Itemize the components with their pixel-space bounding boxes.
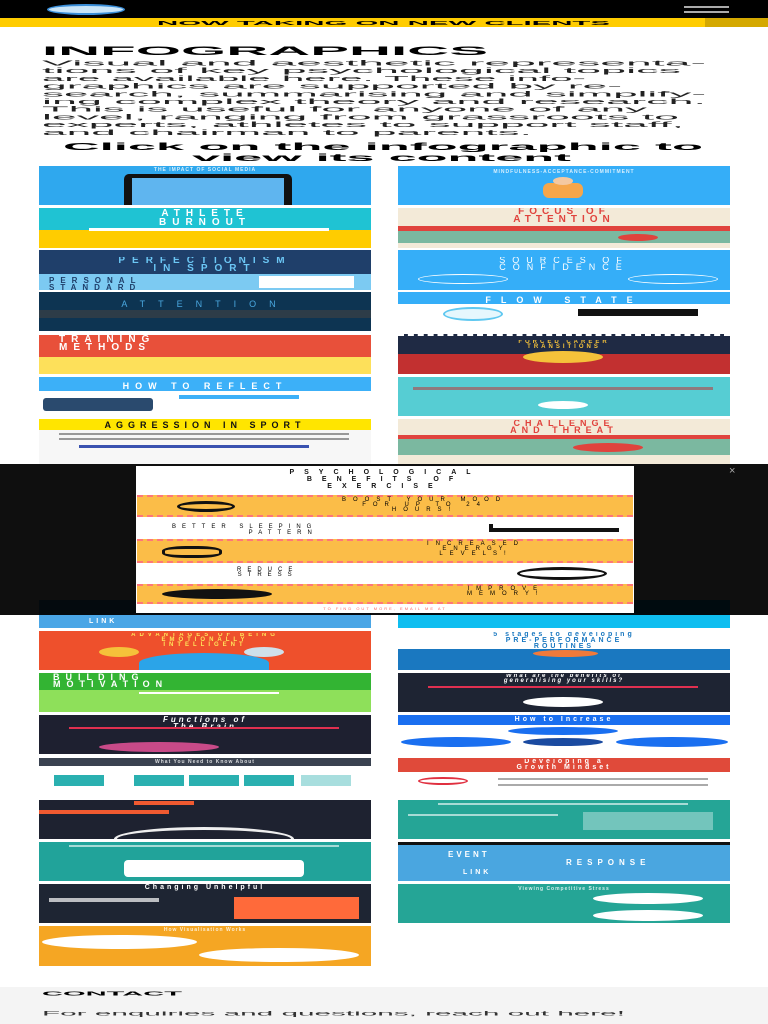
band: sleeping: [172, 524, 619, 536]
band: stress: REDUCE: [237, 567, 298, 573]
call to action: Click on the infographic to: [63, 142, 703, 153]
tile: developing mindset: [398, 758, 730, 797]
band: boost mood: BOOST YOUR MOOD: [342, 497, 507, 503]
tile: challenge and threat: [398, 419, 730, 464]
tile: sources of confidence: [398, 250, 730, 290]
tile: perfectionism: [39, 250, 371, 290]
intro paragraph: Visual and aesthetic representa-: [42, 60, 710, 68]
band: energy: LEVELS!: [439, 551, 513, 557]
tile: emotionally intelligent: [39, 631, 371, 670]
call to action: [63, 142, 703, 164]
tile: social media: [39, 166, 371, 205]
tile: how to increase: How to Increase: [515, 716, 613, 723]
tile: developing mindset: Growth Mindset: [517, 764, 611, 771]
close button: ×: [729, 465, 735, 477]
tile: aggression in sport: AGGRESSION IN SPORT: [104, 420, 306, 430]
tile: building motivation: [39, 673, 371, 712]
tile: event response link: RESPONSE: [566, 858, 650, 867]
intro paragraph: ing complex theory and research.: [42, 99, 706, 106]
band: boost mood: [137, 495, 633, 517]
tile: changing unhelpful: [39, 884, 371, 923]
intro paragraph: search, summarising and simplify-: [42, 91, 710, 98]
tile: competitive stress: Viewing Competitive Stress: [518, 886, 610, 892]
tile: dark body language: [39, 800, 371, 839]
tile: career transitions: TRANSITIONS: [527, 344, 601, 350]
band: energy: INCREASED: [427, 541, 525, 547]
tile: pre-performance routines: PRE-PERFORMANCE: [506, 637, 622, 644]
tile: emotionally intelligent: EMOTIONALLY: [161, 637, 249, 643]
tile: focus of attention: [398, 208, 730, 248]
tile: emotionally intelligent: INTELLIGENT: [163, 642, 247, 648]
tile: attention: ATTENTION: [121, 299, 289, 309]
band: boost mood: HOURS!: [392, 507, 457, 513]
footer text: [42, 992, 626, 1018]
tile: changing unhelpful: Changing Unhelpful: [145, 884, 265, 891]
band: stress: STRESS: [238, 572, 298, 578]
tile: career transitions: [398, 334, 730, 374]
header text block: [42, 21, 710, 164]
band: memory: [137, 584, 633, 604]
tile: teal perspective: [39, 842, 371, 881]
call to action: view its content: [192, 153, 574, 164]
band: sleeping: PATTERN: [249, 530, 318, 536]
tile: levels of motivation: [39, 758, 371, 797]
tile: pre-performance routines: [398, 631, 730, 670]
tile: teal explanation: [398, 800, 730, 839]
tile: training methods: [39, 335, 371, 374]
tile: functions of the brain: [39, 715, 371, 754]
header bar: [0, 0, 768, 18]
modal infographic: psychological benefits of exercise: [136, 466, 634, 613]
banner: new clients: [0, 18, 768, 27]
tile: event response link: LINK: [463, 869, 491, 876]
tile: flow state: [398, 292, 730, 332]
tile: social media: THE IMPACT OF SOCIAL MEDIA: [154, 167, 256, 173]
footer: contact: [0, 987, 768, 1024]
band: memory: MEMORY!: [467, 591, 545, 597]
modal title: [289, 469, 481, 490]
tile: perfectionism: PERSONAL: [49, 276, 141, 285]
tile: generalising: generalising your skills?: [504, 678, 624, 684]
intro paragraph: level, ranging from grassroots to: [42, 114, 680, 121]
intro paragraph: graphics are supported by re-: [42, 84, 626, 91]
tile: how to reflect: [39, 377, 371, 416]
contact heading: CONTACT: [42, 992, 182, 998]
tile: visualisation: How Visualisation Works: [164, 927, 246, 933]
tile: event response link: [398, 842, 730, 881]
band: energy: ENERGY: [442, 546, 510, 552]
tile: link (left, partially under overlay): [39, 600, 371, 628]
tile: teal network: [398, 377, 730, 416]
modal footer note: TO FIND OUT MORE, EMAIL ME AT: [323, 606, 447, 611]
tile: training methods: METHODS: [59, 342, 151, 353]
tile: right blue (under overlay): [398, 600, 730, 628]
tile: flow state: FLOW STATE: [485, 295, 643, 305]
tile: attention: [39, 292, 371, 331]
tile: levels of motivation: What You Need to Know About: [155, 759, 255, 765]
tile: building motivation: MOTIVATION: [53, 679, 168, 689]
band: memory: IMPROVE: [467, 586, 544, 592]
tile: competitive stress: [398, 884, 730, 923]
modal title: PSYCHOLOGICAL: [289, 469, 481, 476]
tile: how to reflect: HOW TO REFLECT: [123, 381, 287, 391]
band: sleeping: BETTER SLEEPING: [172, 524, 317, 530]
modal title: EXERCISE: [327, 483, 443, 490]
intro paragraph: are available here. These info-: [42, 76, 590, 83]
intro paragraph: and chairman to parents.: [42, 130, 532, 137]
intro paragraph: This is useful for anyone of any: [42, 107, 650, 114]
intro paragraph: [42, 60, 710, 137]
menu icon: [684, 6, 729, 13]
band: energy: [137, 539, 633, 563]
title: INFOGRAPHICS: [42, 46, 490, 58]
tile: how to increase: [398, 715, 730, 754]
tile: link (left, partially under overlay): LINK: [89, 618, 117, 625]
tile: pre-performance routines: ROUTINES: [534, 643, 594, 650]
tile: aggression in sport: [39, 419, 371, 464]
modal title: BENEFITS OF: [307, 476, 463, 483]
tile: visualisation: [39, 926, 371, 966]
tile: athlete burnout: [39, 208, 371, 248]
tile: generalising: [398, 673, 730, 712]
modal overlay: [0, 464, 768, 615]
band: boost mood: FOR UP TO 24: [362, 502, 487, 508]
tile: mindfulness: [398, 166, 730, 205]
tile: mindfulness: MINDFULNESS-ACCEPTANCE-COMMITMENT: [493, 169, 635, 175]
band: stress: [237, 566, 607, 580]
banner text: NOW TAKING ON NEW CLIENTS: [157, 21, 612, 27]
intro paragraph: tions of key psychological topics: [42, 68, 684, 75]
logo: [47, 4, 125, 15]
tile: event response link: EVENT: [448, 850, 490, 859]
contact text: For enquiries and questions, reach out here!: [42, 1010, 626, 1018]
intro paragraph: experts, athletes to support staff,: [42, 122, 684, 129]
